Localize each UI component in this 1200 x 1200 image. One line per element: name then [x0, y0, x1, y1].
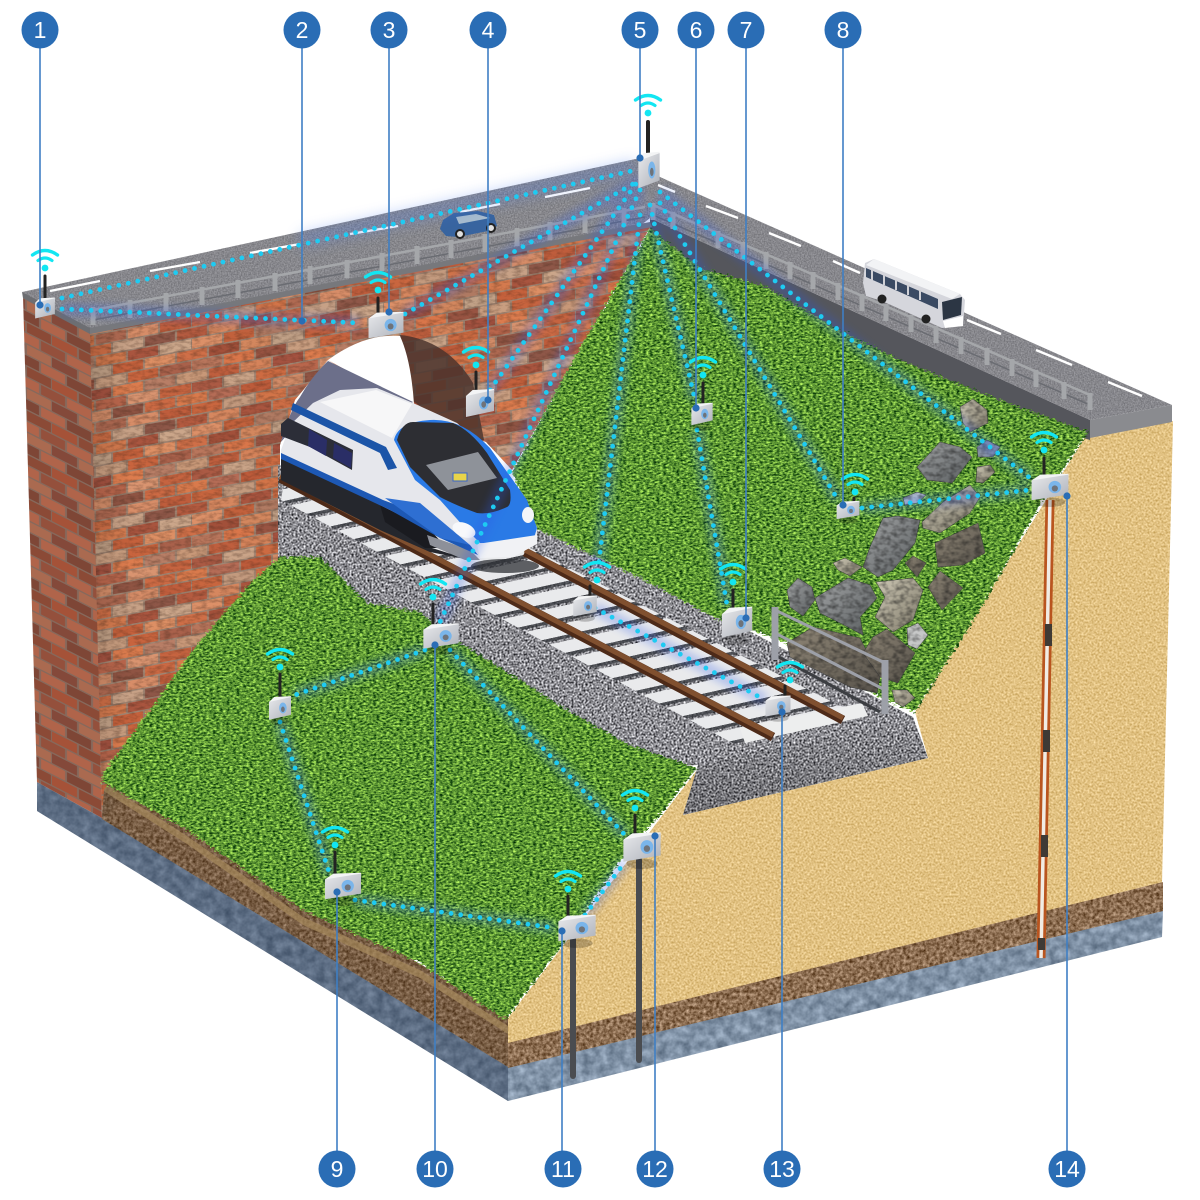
train carriage roof in shadow	[281, 361, 413, 442]
train emerging from tunnel	[281, 361, 539, 573]
callout 2: 2	[296, 17, 308, 43]
callout 12: 12	[642, 1156, 668, 1182]
callout 4: 4	[482, 17, 495, 43]
callout 13	[764, 1150, 800, 1188]
wifi signal icons	[32, 96, 1056, 892]
callout 3: 3	[383, 17, 395, 43]
retaining strip under right road	[650, 218, 1090, 440]
callout 11	[544, 1150, 582, 1188]
callout leader lines	[40, 45, 1067, 1155]
callout 3	[370, 12, 408, 48]
bus on road	[863, 259, 965, 328]
callout 14: 14	[1054, 1156, 1080, 1182]
callout 12	[636, 1150, 674, 1188]
car on road	[440, 211, 497, 238]
grass slope: lower left	[102, 557, 697, 1020]
callout 8: 8	[837, 17, 849, 43]
callout 7	[728, 12, 764, 48]
railway ballast gravel bed	[278, 465, 928, 815]
wireless network glow	[62, 178, 1030, 928]
train windshield	[397, 422, 511, 513]
callout 5	[622, 12, 658, 48]
callout 13: 13	[769, 1156, 795, 1182]
sensor antennas	[45, 122, 1044, 918]
callout 10	[416, 1150, 454, 1188]
callout 11: 11	[551, 1156, 575, 1182]
callout 2	[284, 12, 320, 48]
callout 10: 10	[422, 1156, 448, 1182]
railway track sleepers and rails	[280, 475, 868, 746]
base block: right sand, soil and stone faces	[508, 421, 1173, 1101]
callout 1	[22, 12, 58, 48]
tunnel opening white area	[328, 336, 414, 406]
train windows band	[281, 418, 353, 470]
extensometer pipe under sensor 14	[1038, 500, 1052, 958]
road surface	[22, 158, 1172, 420]
callout 9: 9	[331, 1156, 343, 1182]
callout 6: 6	[690, 17, 702, 43]
road edge slabs	[22, 222, 1172, 438]
train windows	[308, 429, 327, 456]
guardrail: left	[93, 207, 645, 325]
sensor boxes	[35, 152, 1068, 948]
guardrail: right	[653, 203, 1090, 410]
train blue nose	[394, 420, 537, 543]
callout 9	[318, 1150, 356, 1188]
brick wall: front face	[90, 224, 652, 818]
callout 1: 1	[34, 17, 46, 43]
callout 4	[470, 12, 506, 48]
callout 14	[1048, 1150, 1086, 1188]
train body	[281, 388, 537, 558]
rocks	[787, 399, 1000, 707]
shadow under train	[471, 559, 539, 573]
callout 5: 5	[634, 17, 646, 43]
grass slope: upper right	[512, 218, 1090, 712]
road lane markings	[50, 185, 1142, 396]
safety fence	[775, 607, 885, 714]
wireless network dotted links	[62, 170, 1030, 928]
callout 7: 7	[740, 17, 752, 43]
train blue stripes	[291, 403, 397, 470]
callout anchor dots	[36, 154, 1071, 935]
callout 6	[678, 12, 714, 48]
ground rods under sensors 11 and 12	[573, 860, 639, 1076]
train headlights	[450, 519, 478, 541]
callout 8	[824, 12, 862, 48]
train lower skirt	[281, 458, 470, 560]
brick wall: left side face	[23, 296, 102, 818]
sky glow above road	[300, 166, 636, 240]
tunnel interior	[400, 335, 484, 445]
base block: left soil and stone faces	[37, 776, 508, 1101]
